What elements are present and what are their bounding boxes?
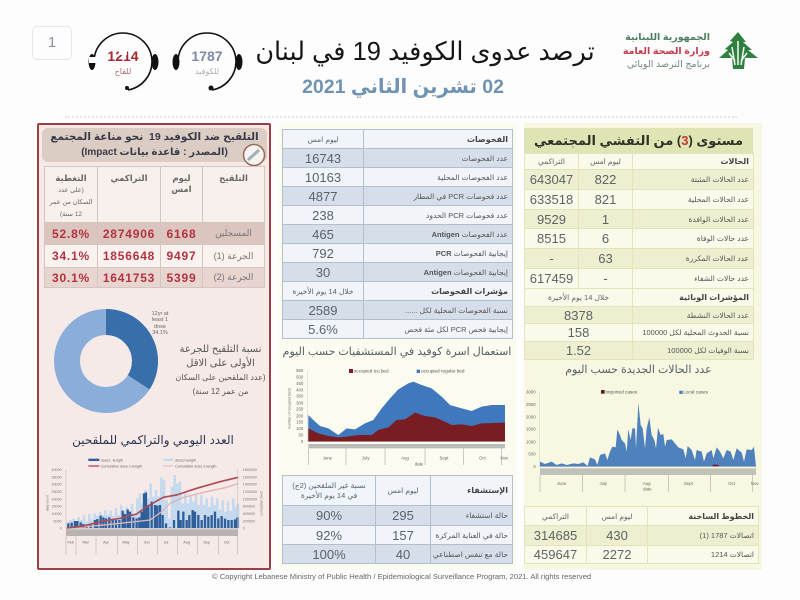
cases table: [524, 153, 754, 360]
cases table: عدد الحالات المحلية: [688, 195, 749, 204]
chart: hospital bed occupancy: occupied regular bed: [421, 368, 465, 373]
cases table: الحالات: [720, 157, 749, 166]
chart: daily and cumulative vaccinated: 5000: [54, 519, 62, 523]
donut caption: نسبة التلقيح للجرعة: [180, 344, 261, 355]
chart: daily and cumulative vaccinated: 1000000: [243, 497, 257, 501]
cases table: عدد الحالات النشطة: [687, 310, 749, 320]
hospitalisation table: 295: [392, 508, 414, 523]
cases table: خلال 14 يوم الأخيرة: [548, 293, 609, 302]
vaccination heading: (المصدر : قاعدة بيانات Impact): [81, 147, 228, 158]
chart: daily and cumulative vaccinated: 15000: [51, 505, 62, 509]
icon: vaccine hotline headset: للقاح: [115, 67, 131, 76]
icon: vaccine hotline headset: 1214: [107, 48, 139, 64]
page number box: [32, 26, 72, 60]
chart: new daily cases: Imported cases: [605, 389, 638, 394]
donut chart: first dose coverage: least 1: [152, 317, 168, 323]
hotlines table: [524, 506, 759, 564]
vaccination heading: التلقيح ضد الكوفيد 19 نحو مناعة المجتمع: [50, 131, 259, 143]
cases table: 6: [602, 231, 609, 246]
cases table: التراكمي: [538, 157, 565, 166]
chart: daily and cumulative vaccinated: 25000: [51, 490, 62, 494]
cases table: 1.52: [566, 343, 591, 358]
donut chart: first dose coverage: dose: [154, 324, 166, 330]
tests table: نسبة الفحوصات المحلية لكل ......: [405, 306, 508, 314]
icon: covid hotline headset: للكوفيد: [195, 67, 219, 76]
chart: hospital bed occupancy: 550: [296, 368, 304, 373]
cases table: نسبة الوفيات لكل 100000: [667, 346, 749, 355]
chart: new daily cases: 500: [528, 452, 536, 457]
cases table: ليوم امس: [590, 157, 621, 166]
chart: hospital bed occupancy: 400: [296, 387, 304, 392]
chart: daily and cumulative vaccinated: Feb: [68, 540, 74, 544]
community spread level heading: مستوى (3) من التفشي المجتمعي: [534, 133, 743, 148]
vaccination table: 30.1%: [52, 270, 90, 284]
donut caption: الأولى على الاقل: [186, 358, 255, 369]
chart: hospital bed occupancy: 300: [296, 400, 304, 405]
ministry logo text: الجمهورية اللبنانية: [625, 32, 710, 43]
icon: syringe badge: [242, 144, 266, 166]
tests table: عدد الفحوصات: [462, 154, 508, 162]
hotlines table: اتصالات 1214: [711, 550, 754, 559]
chart: daily and cumulative vaccinated: Sep: [203, 540, 210, 544]
chart: hospital bed occupancy: 50: [299, 433, 304, 438]
chart: new daily cases: 1000: [526, 439, 536, 444]
hotlines table: 430: [606, 528, 628, 543]
cases table: نسبة الحدوث المحلية لكل 100000: [642, 328, 749, 337]
tests table: خلال 14 يوم الأخيرة: [292, 286, 354, 296]
vaccination table: 34.1%: [52, 249, 90, 263]
hotlines table: اتصالات 1787 (1): [700, 531, 754, 540]
chart: hospital bed occupancy: July: [362, 455, 370, 460]
tests table: إيجابية فحص PCR لكل مئة فحص: [404, 324, 508, 334]
cases table: عدد حالات الشفاء: [694, 274, 749, 283]
cases table: عدد الحالات المثبتة: [691, 175, 749, 184]
chart: hospital bed occupancy: 100: [296, 426, 304, 431]
cases table: 158: [568, 325, 589, 340]
hotlines table: 314685: [534, 528, 577, 543]
chart: daily and cumulative vaccinated: Oct: [224, 540, 230, 544]
chart: daily and cumulative vaccinated: 20000: [51, 497, 62, 501]
icon: covid hotline headset: 1787: [191, 48, 223, 64]
hotlines table: الخطوط الساخنة: [688, 512, 754, 520]
daily and cumulative chart heading: العدد اليومي والتراكمي للملقحين: [72, 433, 234, 447]
donut chart: first dose coverage: [54, 309, 169, 413]
donut caption: [175, 344, 266, 396]
hospitalisation table: الإستشفاء: [467, 486, 508, 495]
cases table: 8515: [537, 231, 566, 246]
chart: daily and cumulative vaccinated: Cumulative dose 1-length: [101, 464, 142, 468]
chart: daily and cumulative vaccinated: dose1 -length: [101, 458, 123, 462]
ministry logo text: برنامج الترصد الوبائي: [627, 59, 710, 70]
cases table: المؤشرات الوبائية: [679, 293, 749, 302]
icon: cedar logo: [719, 32, 758, 69]
community spread level heading: [524, 128, 753, 153]
tests table: 5.6%: [308, 322, 338, 336]
chart: hospital bed occupancy: number of occupied beds: [288, 388, 292, 429]
chart: daily and cumulative vaccinated: 30000: [51, 483, 62, 487]
chart: new daily cases: Nov: [751, 481, 759, 486]
hospitalisation table: ليوم امس: [388, 486, 418, 495]
tests table: ليوم امس: [308, 134, 338, 144]
vaccination table: التلقيح: [219, 173, 248, 183]
tests table: مؤشرات الفحوصات: [431, 286, 508, 296]
ministry logo text: وزارة الصحة العامة: [623, 46, 710, 56]
date subtitle: 02 تشرين الثاني 2021: [302, 76, 504, 98]
chart: hospital bed occupancy: date: [415, 461, 424, 466]
chart: new daily cases: 1500: [526, 427, 536, 432]
chart: hospital bed occupancy: June: [323, 455, 333, 460]
cases table: 9529: [537, 212, 566, 226]
hospitalisation table: [282, 475, 513, 564]
hospitalisation table: حالة في العناية المركزة: [436, 530, 508, 540]
tests table: [282, 129, 513, 339]
chart: daily and cumulative vaccinated: 400000: [243, 512, 255, 516]
chart: new daily cases: June: [557, 481, 567, 486]
chart: new daily cases: Local cases: [683, 389, 709, 394]
tests table: 792: [312, 246, 334, 260]
panel: cases: [524, 123, 762, 570]
chart: daily and cumulative vaccinated: 0: [60, 527, 62, 531]
chart: hospital bed occupancy: Nov: [500, 455, 509, 460]
chart: hospital bed occupancy: 150: [296, 420, 304, 425]
vaccination table: 2874906: [103, 226, 155, 240]
chart: new daily cases: Sept: [684, 481, 694, 486]
cases table: 63: [598, 251, 613, 266]
hotlines table: التراكمي: [542, 512, 569, 520]
vaccination table: 1856648: [103, 249, 155, 263]
chart: new daily cases: 0: [533, 464, 536, 469]
chart: daily and cumulative vaccinated: Jun: [144, 540, 150, 544]
chart: new daily cases: Aug: [643, 481, 651, 486]
vaccination table: التغطية: [55, 173, 87, 183]
hospitalisation table: 92%: [316, 528, 342, 542]
chart: daily and cumulative vaccinated: 40000: [51, 468, 62, 472]
hospital beds chart heading: استعمال اسرة كوفيد في المستشفيات حسب اليوم: [283, 346, 511, 358]
chart: daily and cumulative vaccinated: cumulative count: [260, 491, 264, 516]
hospitalisation table: 40: [396, 546, 410, 562]
cases table: 1: [602, 212, 609, 226]
tests table: 238: [312, 208, 334, 222]
hotlines table: ليوم امس: [602, 512, 632, 520]
chart: hospital bed occupancy: [288, 368, 509, 466]
chart: new daily cases: Oct: [728, 481, 736, 486]
chart: hospital bed occupancy: 0: [301, 439, 304, 444]
vaccination table: (على عدد السكان من عمر 12 سنة): [49, 187, 93, 218]
vaccination table: 9497: [167, 249, 196, 263]
tests table: 16743: [305, 150, 341, 166]
chart: hospital bed occupancy: 450: [296, 381, 304, 386]
vaccination table: 52.8%: [52, 226, 90, 240]
donut chart: first dose coverage: 34.1%: [152, 330, 168, 336]
hospitalisation table: 157: [392, 528, 414, 542]
donut caption: (عدد الملقحين على السكان: [175, 373, 266, 382]
cases table: 822: [595, 172, 616, 187]
chart: daily and cumulative vaccinated: 0: [243, 527, 245, 531]
title: ترصد عدوى الكوفيد 19 في لبنان: [255, 38, 595, 66]
tests table: عدد فحوصات PCR في المطار: [413, 192, 508, 200]
chart: new daily cases: 3000: [526, 390, 536, 395]
cases table: 643047: [530, 172, 573, 187]
cases table: 617459: [530, 271, 573, 286]
chart: new daily cases: 2500: [526, 402, 536, 407]
panel: tests and hospital: [279, 123, 516, 570]
chart: daily and cumulative vaccinated: Apr: [103, 540, 110, 544]
tests table: الفحوصات: [467, 134, 508, 144]
chart: hospital bed occupancy: 350: [296, 394, 304, 399]
tests table: إيجابية الفحوصات Antigen: [424, 268, 508, 276]
hospitalisation table: 90%: [316, 508, 342, 523]
vaccination table: [44, 166, 265, 288]
tests table: عدد الفحوصات المحلية: [437, 172, 508, 182]
new cases chart heading: عدد الحالات الجديدة حسب اليوم: [565, 364, 712, 376]
vaccination table: 5399: [167, 270, 196, 284]
cases table: 8378: [564, 308, 593, 322]
chart: hospital bed occupancy: occupied icu bed: [354, 368, 389, 373]
chart: daily and cumulative vaccinated: Mar: [83, 540, 90, 544]
chart: daily and cumulative vaccinated: 1400000: [243, 483, 257, 487]
tests table: 10163: [305, 170, 341, 184]
hotlines table: 459647: [534, 547, 577, 562]
tests table: 2589: [309, 302, 337, 318]
hospitalisation table: حالة استشفاء: [466, 511, 508, 520]
chart: daily and cumulative vaccinated: 1600000: [243, 475, 257, 479]
cases table: -: [549, 251, 554, 266]
chart: daily and cumulative vaccinated: [45, 458, 264, 555]
vaccination table: الجرعة (1): [214, 250, 253, 260]
cases table: عدد حالات الوفاة: [697, 234, 749, 243]
tests table: 4877: [309, 188, 337, 204]
chart: daily and cumulative vaccinated: Cumulative dose 2-length: [175, 464, 216, 468]
tests table: 30: [316, 264, 330, 280]
vaccination table: المسجلين: [215, 228, 252, 238]
chart: hospital bed occupancy: Sept: [440, 455, 449, 460]
hotlines table: 2272: [603, 547, 631, 562]
chart: hospital bed occupancy: 500: [296, 374, 304, 379]
chart: daily and cumulative vaccinated: 1200000: [243, 490, 257, 494]
vaccination table: الجرعة (2): [214, 272, 253, 282]
chart: new daily cases: 2000: [526, 414, 536, 419]
chart: daily and cumulative vaccinated: 800000: [243, 505, 255, 509]
vaccination table: ليوم امس: [171, 173, 192, 194]
cases table: عدد الحالات المكررة: [686, 254, 749, 263]
ministry logo text: [623, 32, 710, 70]
panel: vaccination: [37, 123, 271, 570]
hospitalisation table: 100%: [312, 546, 346, 562]
tests table: عدد فحوصات PCR الحدود: [426, 210, 508, 220]
chart: daily and cumulative vaccinated: daily count: [45, 495, 49, 511]
hospitalisation table: حالة مع تنفس اصطناعي: [433, 550, 508, 558]
cases table: -: [603, 271, 608, 286]
chart: daily and cumulative vaccinated: dose2-length: [175, 458, 196, 462]
chart: new daily cases: July: [599, 481, 608, 486]
chart: hospital bed occupancy: 250: [296, 407, 304, 412]
icon: covid hotline headset: [172, 32, 242, 91]
chart: daily and cumulative vaccinated: Jul: [164, 540, 169, 544]
chart: daily and cumulative vaccinated: 10000: [51, 512, 62, 516]
chart: daily and cumulative vaccinated: 1800000: [243, 468, 257, 472]
copyright footer: © Copyright Lebanese Ministry of Public Health / Epidemiological Surveillance Program, 2021. All rights reserved: [212, 572, 591, 581]
cases table: 633518: [530, 192, 573, 207]
vaccination table: 1641753: [103, 270, 155, 284]
cases table: 821: [595, 192, 616, 207]
vaccination table: التراكمي: [110, 173, 148, 183]
chart: new daily cases: [526, 389, 759, 492]
donut caption: من عمر 12 سنة): [193, 387, 248, 396]
tests table: إيجابية الفحوصات PCR: [436, 248, 508, 258]
chart: hospital bed occupancy: Aug: [401, 455, 409, 460]
vaccination heading: [42, 128, 267, 162]
chart: hospital bed occupancy: Oct: [479, 455, 486, 460]
chart: new daily cases: date: [643, 487, 652, 492]
vaccination table: 6168: [167, 226, 196, 240]
hospitalisation table: نسبة غير الملقحين (2ج) في 14 يوم الأخيرة: [292, 480, 366, 500]
chart: daily and cumulative vaccinated: Aug: [183, 540, 190, 544]
tests table: 465: [312, 226, 334, 242]
chart: daily and cumulative vaccinated: 200000: [243, 519, 255, 523]
icon: vaccine hotline headset: [88, 32, 158, 91]
chart: daily and cumulative vaccinated: May: [123, 540, 130, 544]
chart: hospital bed occupancy: 200: [296, 413, 304, 418]
page number box: 1: [48, 34, 56, 51]
tests table: عدد الفحوصات Antigen: [432, 230, 508, 238]
donut chart: first dose coverage: 12yr at: [152, 311, 169, 317]
cases table: عدد الحالات الوافدة: [688, 214, 749, 224]
chart: daily and cumulative vaccinated: 35000: [51, 475, 62, 479]
